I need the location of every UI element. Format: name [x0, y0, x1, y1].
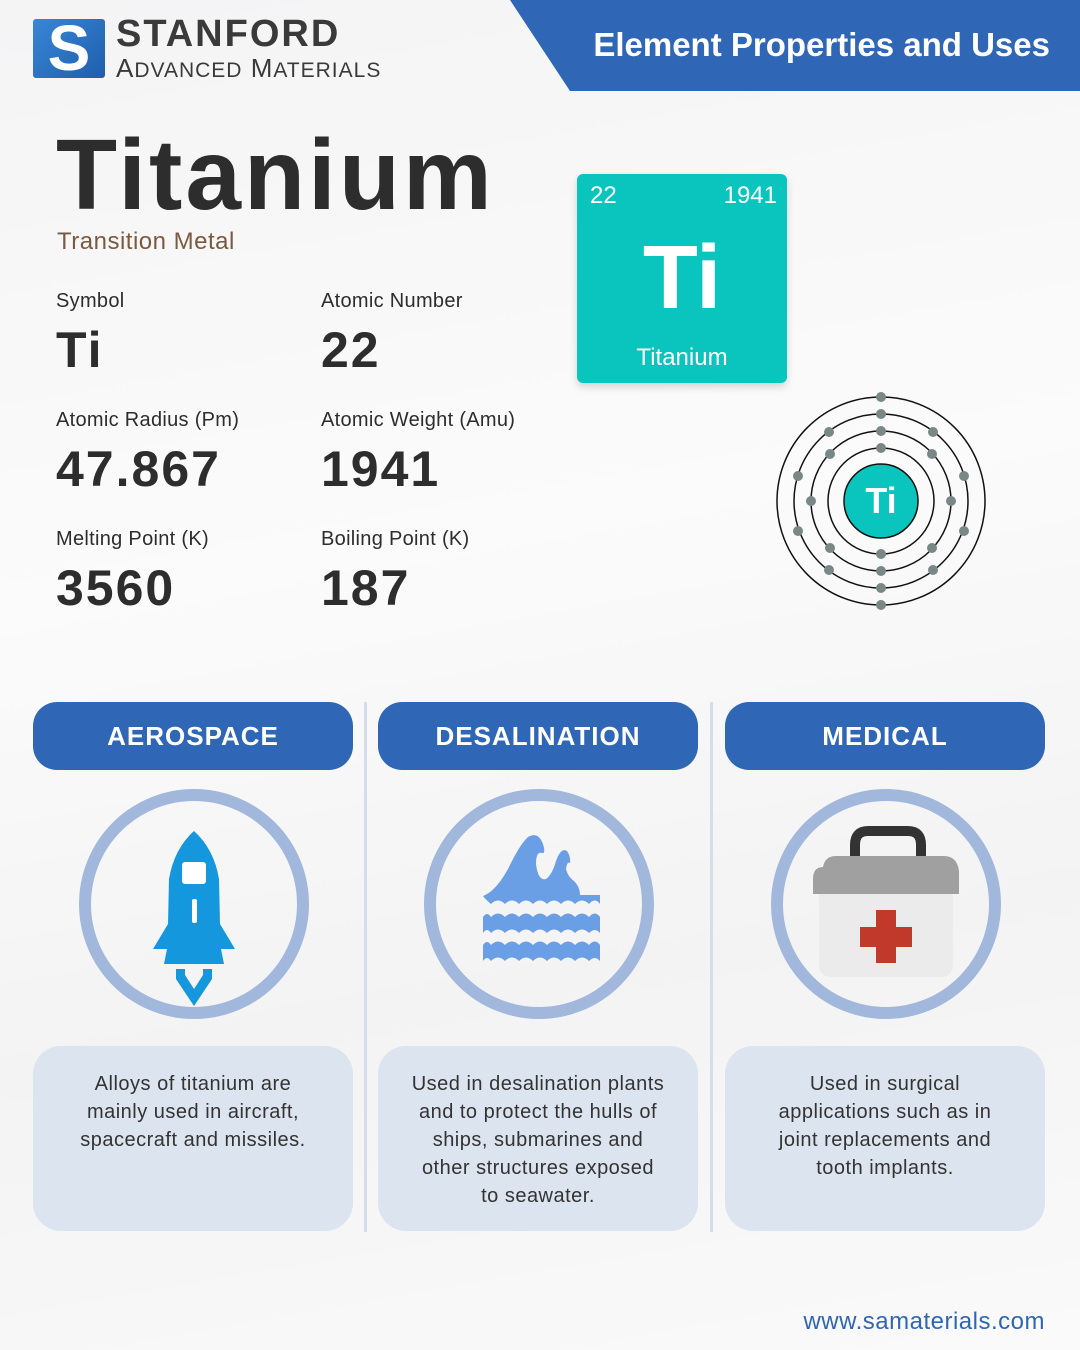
card: aerospace — [33, 1046, 353, 1231]
prop: melting: Melting Point (K) — [56, 528, 209, 550]
pill: medical: MEDICAL — [822, 720, 948, 750]
pill: aerospace: AEROSPACE — [107, 720, 279, 750]
card: medical: joint replacements and — [779, 1129, 991, 1151]
atom diagram — [776, 392, 986, 610]
card: medical: tooth implants. — [816, 1157, 954, 1179]
card: medical: applications such as in — [779, 1101, 991, 1123]
icon: logo S — [33, 19, 105, 78]
logo text: STANFORD — [116, 13, 340, 55]
element tile — [577, 174, 787, 383]
prop: symbol — [56, 290, 124, 378]
prop: atomic number: Atomic Number — [321, 290, 463, 312]
logo — [33, 12, 340, 84]
card: desalination: other structures exposed — [422, 1157, 654, 1179]
element tile: Ti — [643, 228, 721, 328]
icon: rocket — [79, 789, 309, 1019]
prop: weight: Atomic Weight (Amu) — [321, 409, 515, 431]
logo subtitle: ADVANCED MATERIALS — [116, 53, 381, 83]
pill: desalination: DESALINATION — [435, 720, 641, 750]
prop: symbol: Symbol — [56, 290, 124, 312]
footer url: www.samaterials.com — [803, 1308, 1045, 1335]
card: aerospace: spacecraft and missiles. — [80, 1129, 306, 1151]
card: medical — [725, 1046, 1045, 1231]
prop: symbol: Ti — [56, 322, 104, 378]
banner title: Element Properties and Uses — [593, 26, 1050, 63]
element tile: 1941 — [724, 182, 777, 209]
property grid — [56, 290, 515, 616]
icon: medical kit — [771, 789, 1001, 1019]
prop: radius: Atomic Radius (Pm) — [56, 409, 239, 431]
prop: atomic number — [321, 290, 463, 378]
card: aerospace: Alloys of titanium are — [95, 1073, 291, 1095]
prop: radius: 47.867 — [56, 441, 221, 497]
prop: radius — [56, 409, 239, 497]
prop: weight: 1941 — [321, 441, 440, 497]
card: desalination: ships, submarines and — [433, 1129, 643, 1151]
pill: aerospace — [33, 702, 353, 770]
atom diagram: Ti — [865, 480, 897, 521]
prop: atomic number: 22 — [321, 322, 381, 378]
pill: medical — [725, 702, 1045, 770]
header banner — [510, 0, 1080, 91]
prop: melting — [56, 528, 209, 616]
subtitle: Transition Metal — [57, 228, 235, 255]
prop: boiling: 187 — [321, 560, 410, 616]
card: desalination — [378, 1046, 698, 1231]
card: desalination: and to protect the hulls of — [419, 1101, 657, 1123]
pill: desalination — [378, 702, 698, 770]
element tile: Titanium — [636, 344, 728, 371]
card: aerospace: mainly used in aircraft, — [87, 1101, 299, 1123]
element tile: 22 — [590, 182, 617, 209]
prop: weight — [321, 409, 515, 497]
title: Titanium — [56, 119, 495, 231]
prop: boiling: Boiling Point (K) — [321, 528, 470, 550]
card: desalination: Used in desalination plants — [412, 1073, 664, 1095]
card: medical: Used in surgical — [810, 1073, 960, 1095]
icon: waves — [424, 789, 654, 1019]
icon: logo S: S — [48, 12, 90, 84]
prop: boiling — [321, 528, 470, 616]
card: desalination: to seawater. — [481, 1185, 595, 1207]
prop: melting: 3560 — [56, 560, 175, 616]
